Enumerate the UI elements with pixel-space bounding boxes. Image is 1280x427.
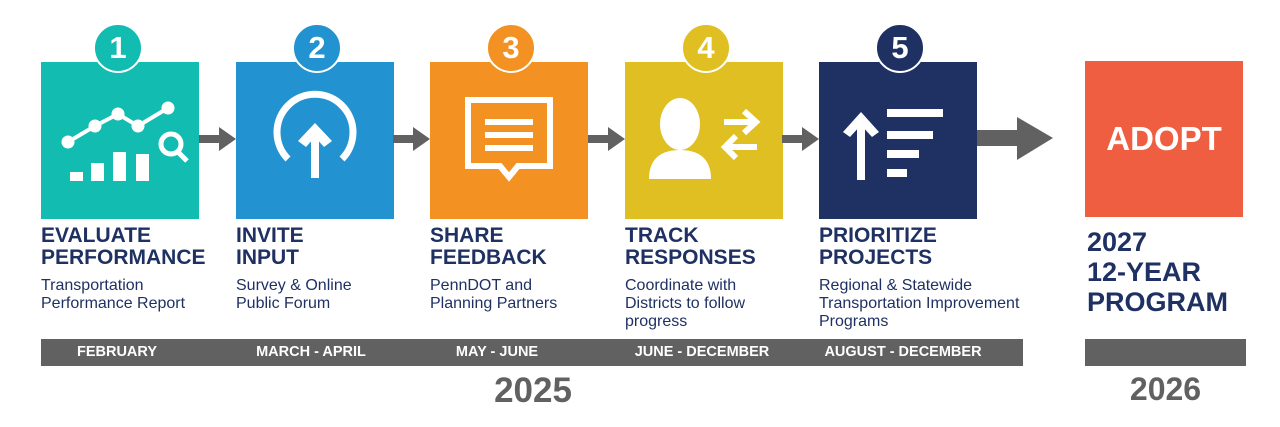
number 2: 2 bbox=[308, 30, 326, 65]
heading 5 bbox=[819, 224, 937, 269]
heading 5: PROJECTS bbox=[819, 246, 932, 269]
step 4 box bbox=[625, 62, 783, 219]
heading 3: FEEDBACK bbox=[430, 246, 547, 269]
text 5: Transportation Improvement bbox=[819, 295, 1019, 312]
heading adopt bbox=[1087, 227, 1228, 317]
number 2 bbox=[292, 23, 342, 73]
text 4: Districts to follow bbox=[625, 295, 745, 312]
text 1: Transportation bbox=[41, 277, 144, 294]
heading 2 bbox=[236, 224, 304, 269]
adopt box bbox=[1085, 61, 1243, 217]
icon: chart with magnifier bbox=[62, 102, 189, 181]
heading adopt: PROGRAM bbox=[1087, 287, 1228, 317]
heading adopt: 2027 bbox=[1087, 227, 1147, 257]
text 5: Programs bbox=[819, 313, 888, 330]
heading 2: INPUT bbox=[236, 246, 299, 269]
arrow 3-4 bbox=[588, 127, 625, 151]
number 4 bbox=[681, 23, 731, 73]
icon: speech bubble bbox=[465, 97, 553, 182]
heading 5: PRIORITIZE bbox=[819, 224, 937, 247]
year 2026: 2026 bbox=[1130, 371, 1201, 407]
number 1 bbox=[93, 23, 143, 73]
timeline bar 2026 bbox=[1085, 339, 1246, 366]
text: JUNE - DECEMBER bbox=[635, 344, 769, 360]
text 1 bbox=[41, 277, 185, 312]
text 5: Regional & Statewide bbox=[819, 277, 972, 294]
text 3 bbox=[430, 277, 557, 312]
number 1: 1 bbox=[109, 30, 127, 65]
heading adopt: 12-YEAR bbox=[1087, 257, 1201, 287]
arrow 1-2 bbox=[199, 127, 236, 151]
number 3 bbox=[486, 23, 536, 73]
text 2: Public Forum bbox=[236, 295, 330, 312]
text 3: Planning Partners bbox=[430, 295, 557, 312]
text 2: Survey & Online bbox=[236, 277, 352, 294]
step 1 box bbox=[41, 62, 199, 219]
step 3 box bbox=[430, 62, 588, 219]
heading 2: INVITE bbox=[236, 224, 304, 247]
adopt box: ADOPT bbox=[1106, 120, 1222, 157]
text 5 bbox=[819, 277, 1020, 330]
arrow 4-5 bbox=[782, 127, 819, 151]
heading 1: EVALUATE bbox=[41, 224, 151, 247]
text 4: Coordinate with bbox=[625, 277, 736, 294]
heading 1: PERFORMANCE bbox=[41, 246, 206, 269]
number 4: 4 bbox=[697, 30, 715, 65]
heading 4: RESPONSES bbox=[625, 246, 756, 269]
heading 4 bbox=[625, 224, 756, 269]
text 1: Performance Report bbox=[41, 295, 185, 312]
number 3: 3 bbox=[502, 30, 520, 65]
number 5 bbox=[875, 23, 925, 73]
number 5: 5 bbox=[891, 30, 909, 65]
text 4: progress bbox=[625, 313, 687, 330]
step 2 box bbox=[236, 62, 394, 219]
heading 1 bbox=[41, 224, 206, 269]
text: AUGUST - DECEMBER bbox=[824, 344, 982, 360]
icon: person with arrows bbox=[649, 98, 760, 179]
text 2 bbox=[236, 277, 352, 312]
year 2025: 2025 bbox=[494, 371, 572, 410]
arrow 2-3 bbox=[393, 127, 430, 151]
heading 3: SHARE bbox=[430, 224, 504, 247]
text 3: PennDOT and bbox=[430, 277, 532, 294]
icon: priority list bbox=[843, 109, 943, 180]
text: MAY - JUNE bbox=[456, 344, 538, 360]
heading 4: TRACK bbox=[625, 224, 698, 247]
icon: gauge arrow bbox=[274, 90, 356, 178]
text: MARCH - APRIL bbox=[256, 344, 366, 360]
timeline labels: FEBRUARY bbox=[77, 344, 157, 360]
text 4 bbox=[625, 277, 746, 330]
timeline bar 2025 bbox=[41, 339, 1023, 366]
big arrow to adopt bbox=[977, 117, 1053, 160]
step 5 box bbox=[819, 62, 977, 219]
heading 3 bbox=[430, 224, 547, 269]
